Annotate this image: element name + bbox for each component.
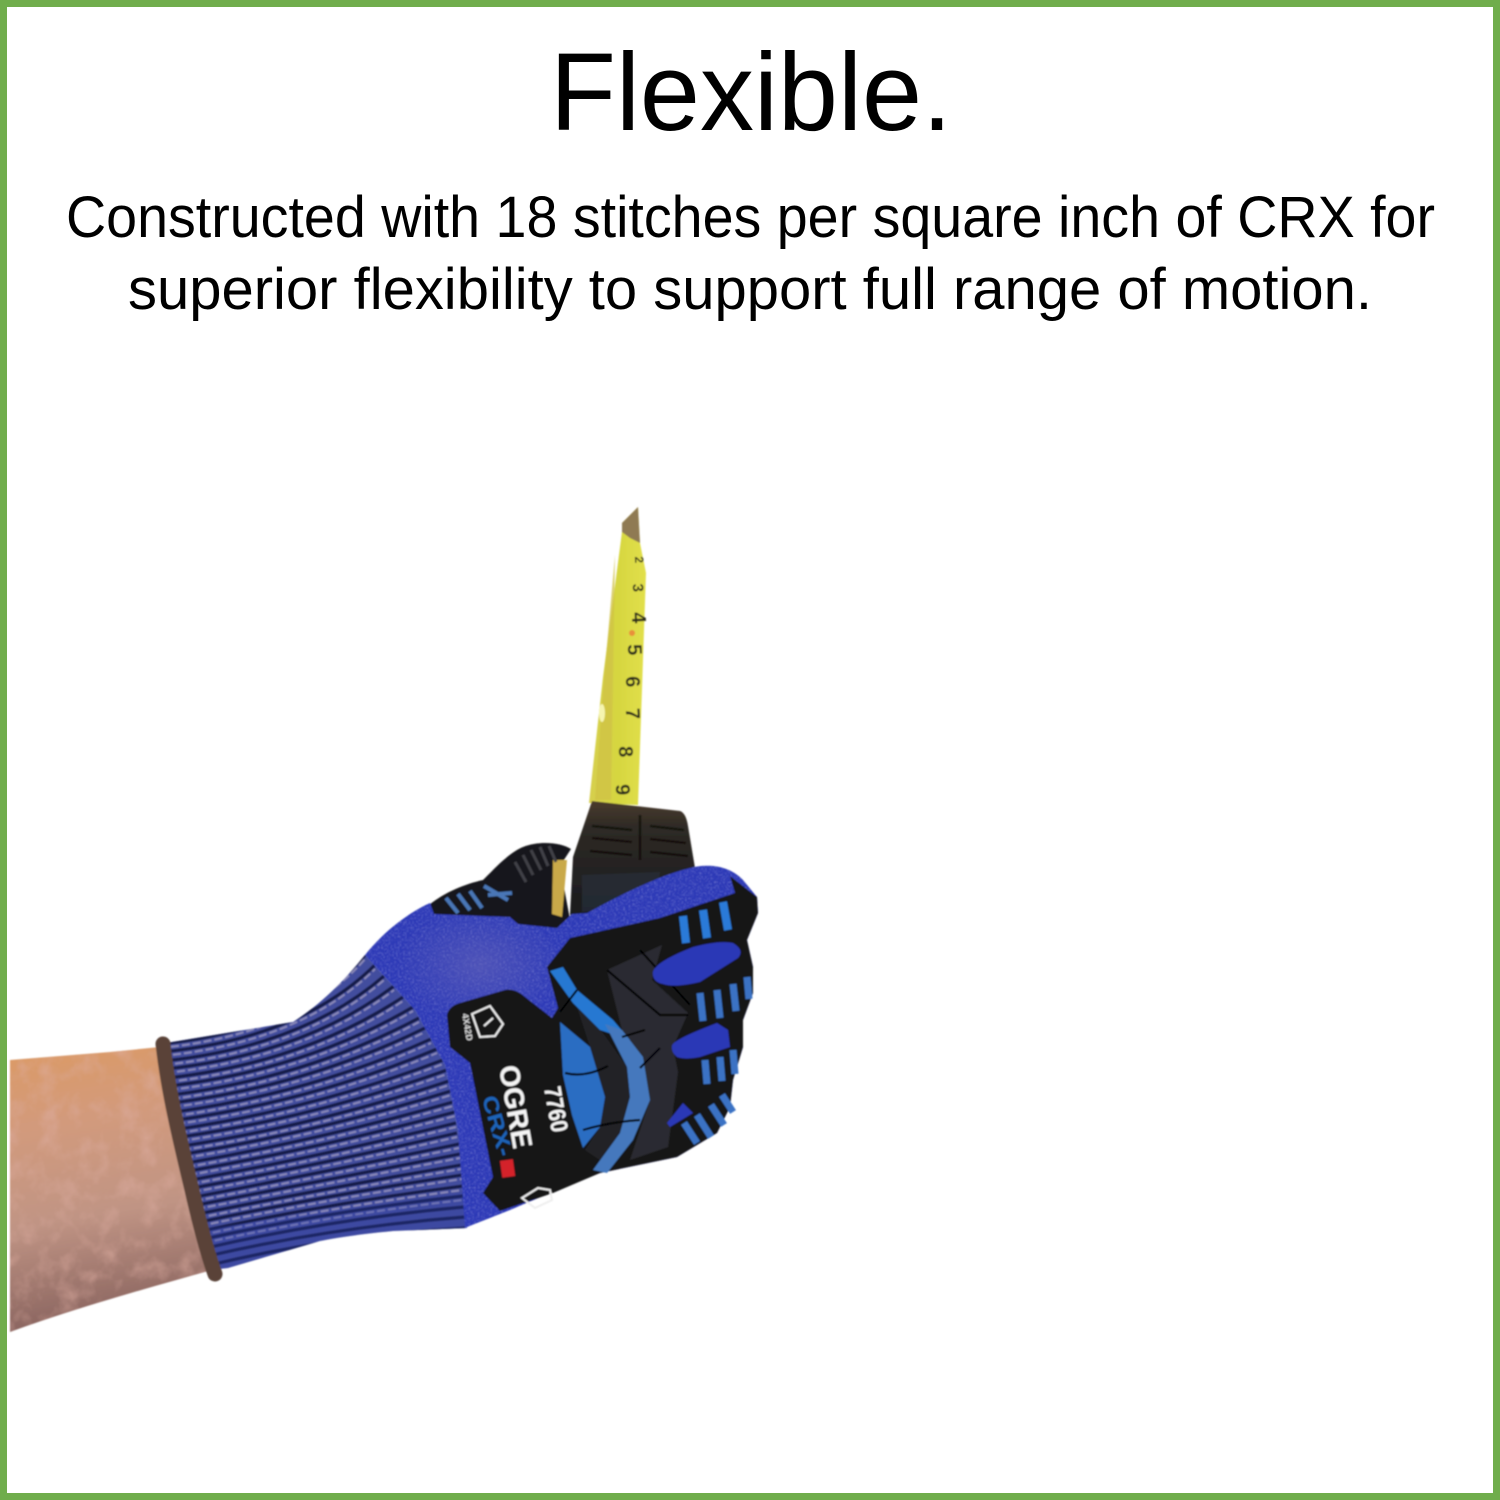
glove branding: CRX- bbox=[477, 1093, 516, 1159]
glove branding: 4X42D bbox=[460, 1013, 475, 1042]
blue lens panel bbox=[560, 1022, 605, 1148]
glove branding bbox=[460, 1006, 573, 1208]
tape measure blade bbox=[589, 507, 649, 805]
photo: gloved hand holding a tape measure bbox=[10, 507, 760, 1340]
icon: lower safety shield bbox=[522, 1188, 552, 1208]
arm bbox=[10, 1040, 220, 1340]
tape measure blade: 6 bbox=[621, 676, 643, 688]
tape measure blade: 2 bbox=[632, 556, 646, 564]
tape measure blade: 5 bbox=[623, 644, 645, 656]
cuff hem bbox=[163, 1044, 215, 1274]
tape measure blade: 9 bbox=[611, 784, 633, 796]
glove branding: OGRE bbox=[493, 1063, 538, 1151]
thumb bbox=[429, 843, 572, 930]
tape measure blade: 8 bbox=[614, 746, 636, 758]
blue arc strip bbox=[550, 967, 630, 1040]
glove branding: 7760 bbox=[538, 1084, 573, 1134]
panel seams bbox=[560, 950, 690, 1130]
description text: superior flexibility to support full range of motion. bbox=[128, 257, 1372, 322]
icon: upper safety shield bbox=[472, 1006, 503, 1037]
description text: Constructed with 18 stitches per square inch of CRX for bbox=[66, 185, 1435, 250]
impact guard on back of hand bbox=[447, 876, 758, 1211]
finger ridges bbox=[653, 902, 749, 1143]
glove body bbox=[360, 860, 760, 1230]
grey panels bbox=[577, 945, 688, 1160]
knit sleeve with ribbing bbox=[169, 954, 468, 1270]
tape measure blade: 4 bbox=[627, 612, 649, 625]
tape measure blade: 3 bbox=[629, 583, 646, 592]
tape measure blade: 7 bbox=[621, 708, 643, 720]
tape measure case bbox=[570, 801, 697, 930]
title: Flexible. bbox=[550, 31, 952, 154]
description text bbox=[66, 185, 1435, 322]
knit ribs bbox=[160, 955, 465, 1265]
